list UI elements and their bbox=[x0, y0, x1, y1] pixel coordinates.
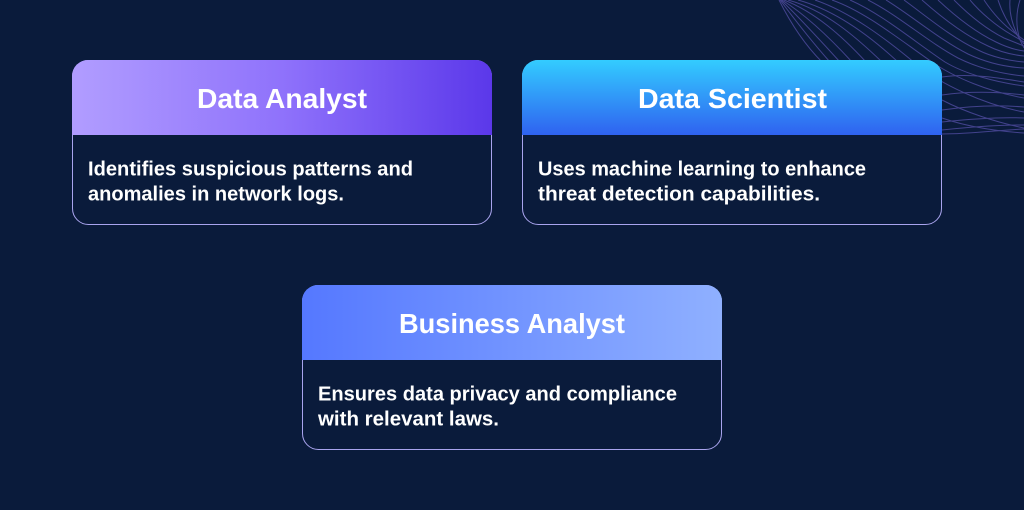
text: Data Analyst description: Identifies suspicious patterns and bbox=[88, 158, 413, 180]
text: Business Analyst description bbox=[317, 384, 677, 430]
heading: Business Analyst: Business Analyst bbox=[399, 308, 625, 339]
text: Data Scientist description bbox=[538, 158, 866, 206]
heading: Data Analyst: Data Analyst bbox=[197, 83, 367, 114]
text: Data Scientist description: threat detection capabilities. bbox=[538, 184, 820, 206]
panel: Data Analyst bbox=[72, 60, 492, 224]
decorative wave lines bbox=[779, 0, 1024, 134]
text: Business Analyst description: Ensures data privacy and compliance bbox=[318, 384, 677, 406]
header: Data Scientist bbox=[522, 60, 942, 135]
header: Data Analyst bbox=[72, 60, 492, 135]
text: Business Analyst description: with relevant laws. bbox=[317, 408, 499, 430]
header: Business Analyst bbox=[302, 285, 722, 360]
panel: Data Scientist bbox=[522, 60, 942, 224]
heading: Data Scientist: Data Scientist bbox=[638, 83, 827, 114]
text: Data Analyst description bbox=[88, 158, 413, 206]
text: Data Analyst description: anomalies in network logs. bbox=[88, 184, 344, 206]
panel: Business Analyst bbox=[302, 285, 722, 450]
text: Data Scientist description: Uses machine learning to enhance bbox=[538, 158, 866, 180]
